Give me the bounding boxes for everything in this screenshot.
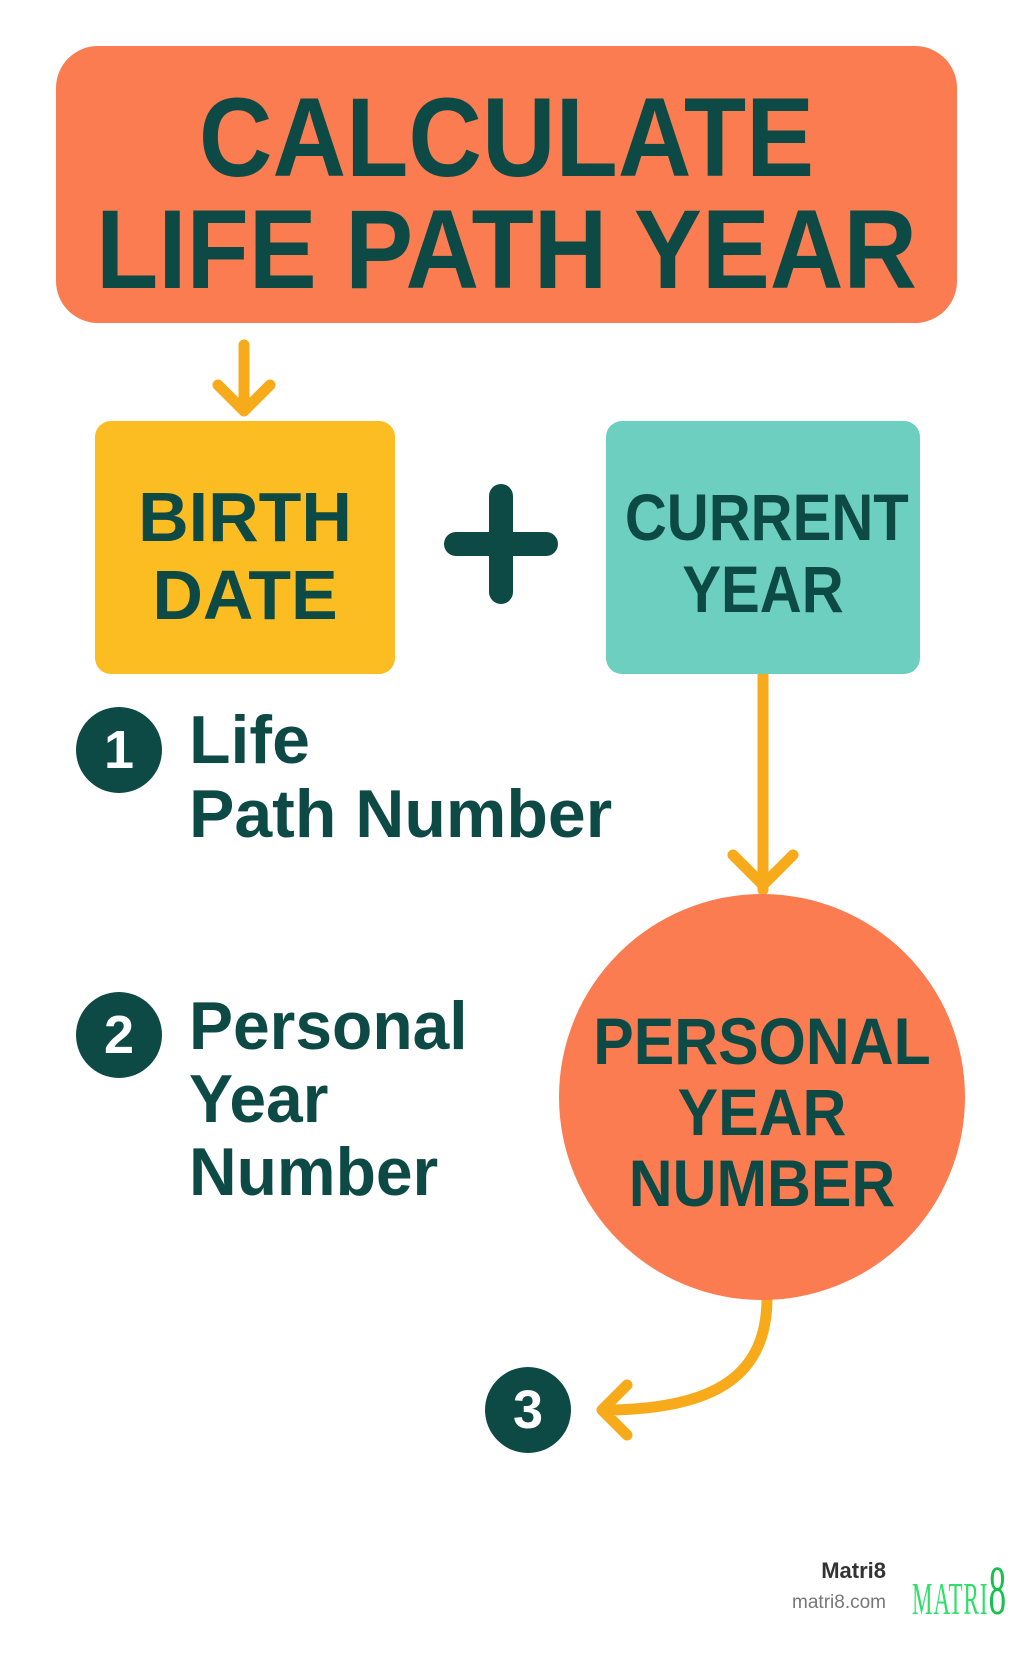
box: current year: YEAR — [682, 552, 844, 626]
circle: personal year number: YEAR — [678, 1075, 846, 1149]
box: birth date: BIRTH — [138, 478, 352, 556]
box: current year: CURRENT — [625, 480, 909, 554]
circle: personal year number — [559, 894, 965, 1300]
label 2: Year — [189, 1061, 328, 1137]
badge 1: 1 — [104, 720, 134, 780]
title banner — [56, 46, 957, 323]
box: current year — [606, 421, 920, 674]
badge 2 — [76, 992, 162, 1078]
badge 2: 2 — [104, 1005, 134, 1065]
label 1 — [189, 702, 612, 852]
step 1 — [76, 702, 612, 852]
step 2 — [76, 988, 468, 1210]
label 1: Life — [189, 702, 310, 778]
arrow: current year to circle — [733, 674, 793, 890]
box: birth date — [95, 421, 395, 674]
footer brand: Matri8 — [821, 1558, 886, 1583]
badge 3: 3 — [513, 1380, 543, 1440]
label 1: Path Number — [189, 776, 612, 852]
badge 3 — [485, 1367, 571, 1453]
arrow: into birth date — [218, 345, 270, 411]
circle: personal year number: NUMBER — [629, 1146, 895, 1220]
label 2 — [189, 988, 468, 1210]
icon: plus — [456, 496, 546, 592]
label 2: Number — [189, 1134, 438, 1210]
label 2: Personal — [189, 988, 468, 1064]
title text: LIFE PATH YEAR — [96, 187, 917, 312]
arrow: circle to step 3 — [602, 1298, 767, 1435]
footer brand: matri8.com — [792, 1592, 886, 1613]
title text — [96, 75, 917, 312]
badge 1 — [76, 707, 162, 793]
title text: CALCULATE — [199, 75, 814, 200]
box: birth date: DATE — [152, 556, 338, 634]
circle: personal year number: PERSONAL — [593, 1004, 931, 1078]
footer brand — [792, 1558, 886, 1613]
logo: MATRI8 — [912, 1553, 1007, 1630]
